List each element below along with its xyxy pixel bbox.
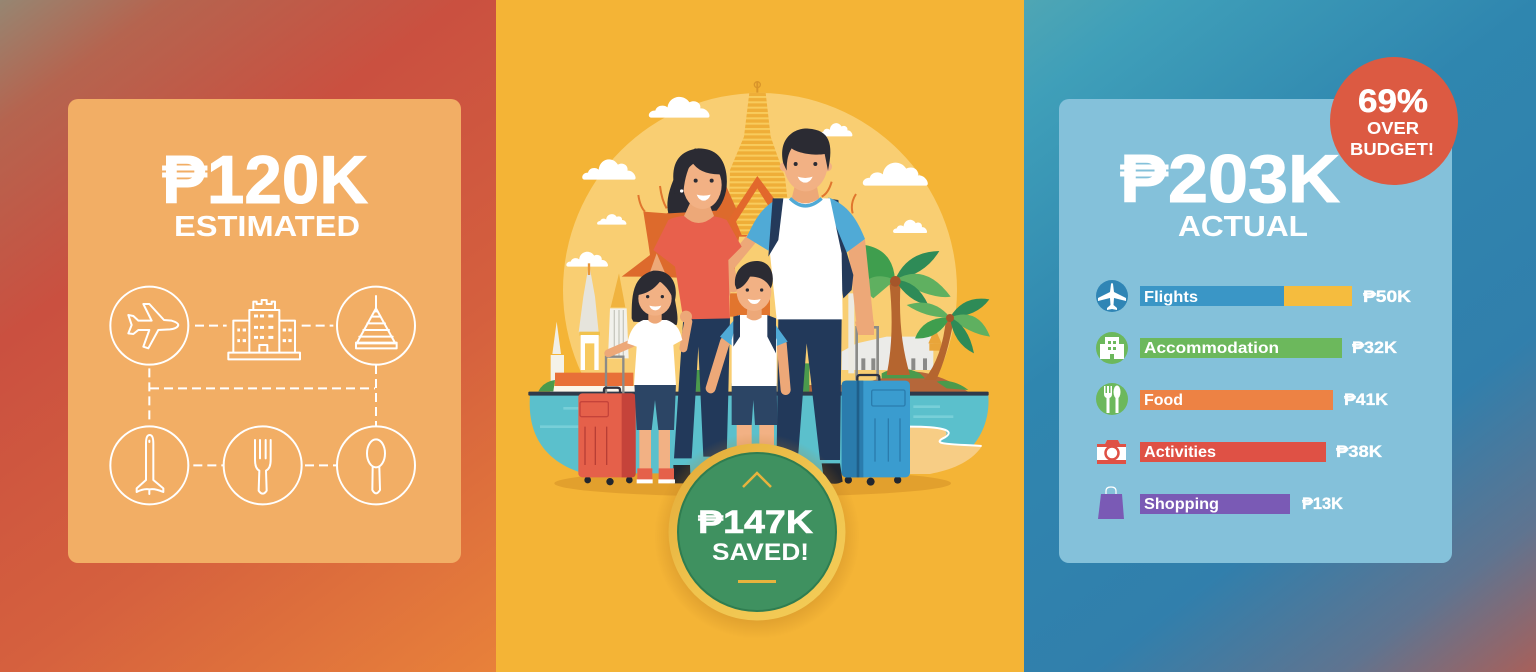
badge: saved amount [654, 433, 860, 639]
row: activities: ₱38K [1336, 443, 1382, 461]
icon: spoon [337, 426, 415, 504]
badge amount: ₱147K [698, 504, 813, 540]
row: shopping: Shopping [1144, 496, 1219, 513]
icon: airplane [110, 287, 188, 365]
panel: estimated background [0, 0, 496, 672]
illustration: family with landmarks [528, 82, 990, 497]
red suitcase [578, 357, 636, 485]
row: flights [1096, 280, 1411, 312]
row: accommodation: ₱32K [1352, 339, 1397, 357]
row: flights: Flights [1144, 289, 1198, 306]
card: actual spending [1059, 99, 1452, 563]
sea [528, 392, 989, 474]
green strips behind family [695, 363, 809, 392]
row: flights: ₱50K [1363, 288, 1411, 306]
heading: estimated amount: ₱120K [162, 142, 368, 218]
right palace and island [800, 293, 968, 392]
panel: family background [496, 0, 1024, 672]
boy [711, 261, 788, 450]
ground shadow [554, 470, 951, 497]
callout: over budget: 69% [1358, 83, 1428, 119]
row: activities [1097, 440, 1382, 464]
row: activities: Activities [1144, 444, 1216, 461]
icon: plane front view [110, 426, 188, 504]
woman [648, 148, 742, 483]
callout: over budget: OVER [1367, 118, 1419, 138]
row: shopping: ₱13K [1302, 495, 1343, 513]
palm trees [860, 245, 990, 380]
badge label: SAVED! [712, 539, 809, 566]
sun disc [563, 93, 957, 392]
blue suitcase [842, 327, 910, 486]
icon: temple [337, 287, 415, 365]
heading: actual amount: ₱203K [1120, 141, 1340, 217]
icon: hotel [228, 300, 300, 359]
callout: over budget [1330, 57, 1458, 185]
man [728, 129, 874, 484]
left pagodas [538, 263, 635, 392]
icon network [110, 287, 415, 504]
row: food: Food [1144, 392, 1183, 409]
card: estimated budget [68, 99, 461, 563]
row: food [1096, 383, 1388, 415]
heading: actual label: ACTUAL [1178, 211, 1308, 243]
row: accommodation: Accommodation [1144, 340, 1279, 357]
icon: fork [224, 426, 302, 504]
row: accommodation [1096, 332, 1397, 364]
callout: over budget: BUDGET! [1350, 139, 1434, 159]
icon: chevron up [743, 473, 771, 487]
row: shopping [1098, 487, 1343, 519]
girl [608, 271, 692, 483]
clouds [566, 97, 928, 267]
golden temple [622, 82, 856, 317]
heading: estimated label: ESTIMATED [174, 211, 360, 243]
row: food: ₱41K [1344, 391, 1388, 409]
panel: actual background [1024, 0, 1536, 672]
